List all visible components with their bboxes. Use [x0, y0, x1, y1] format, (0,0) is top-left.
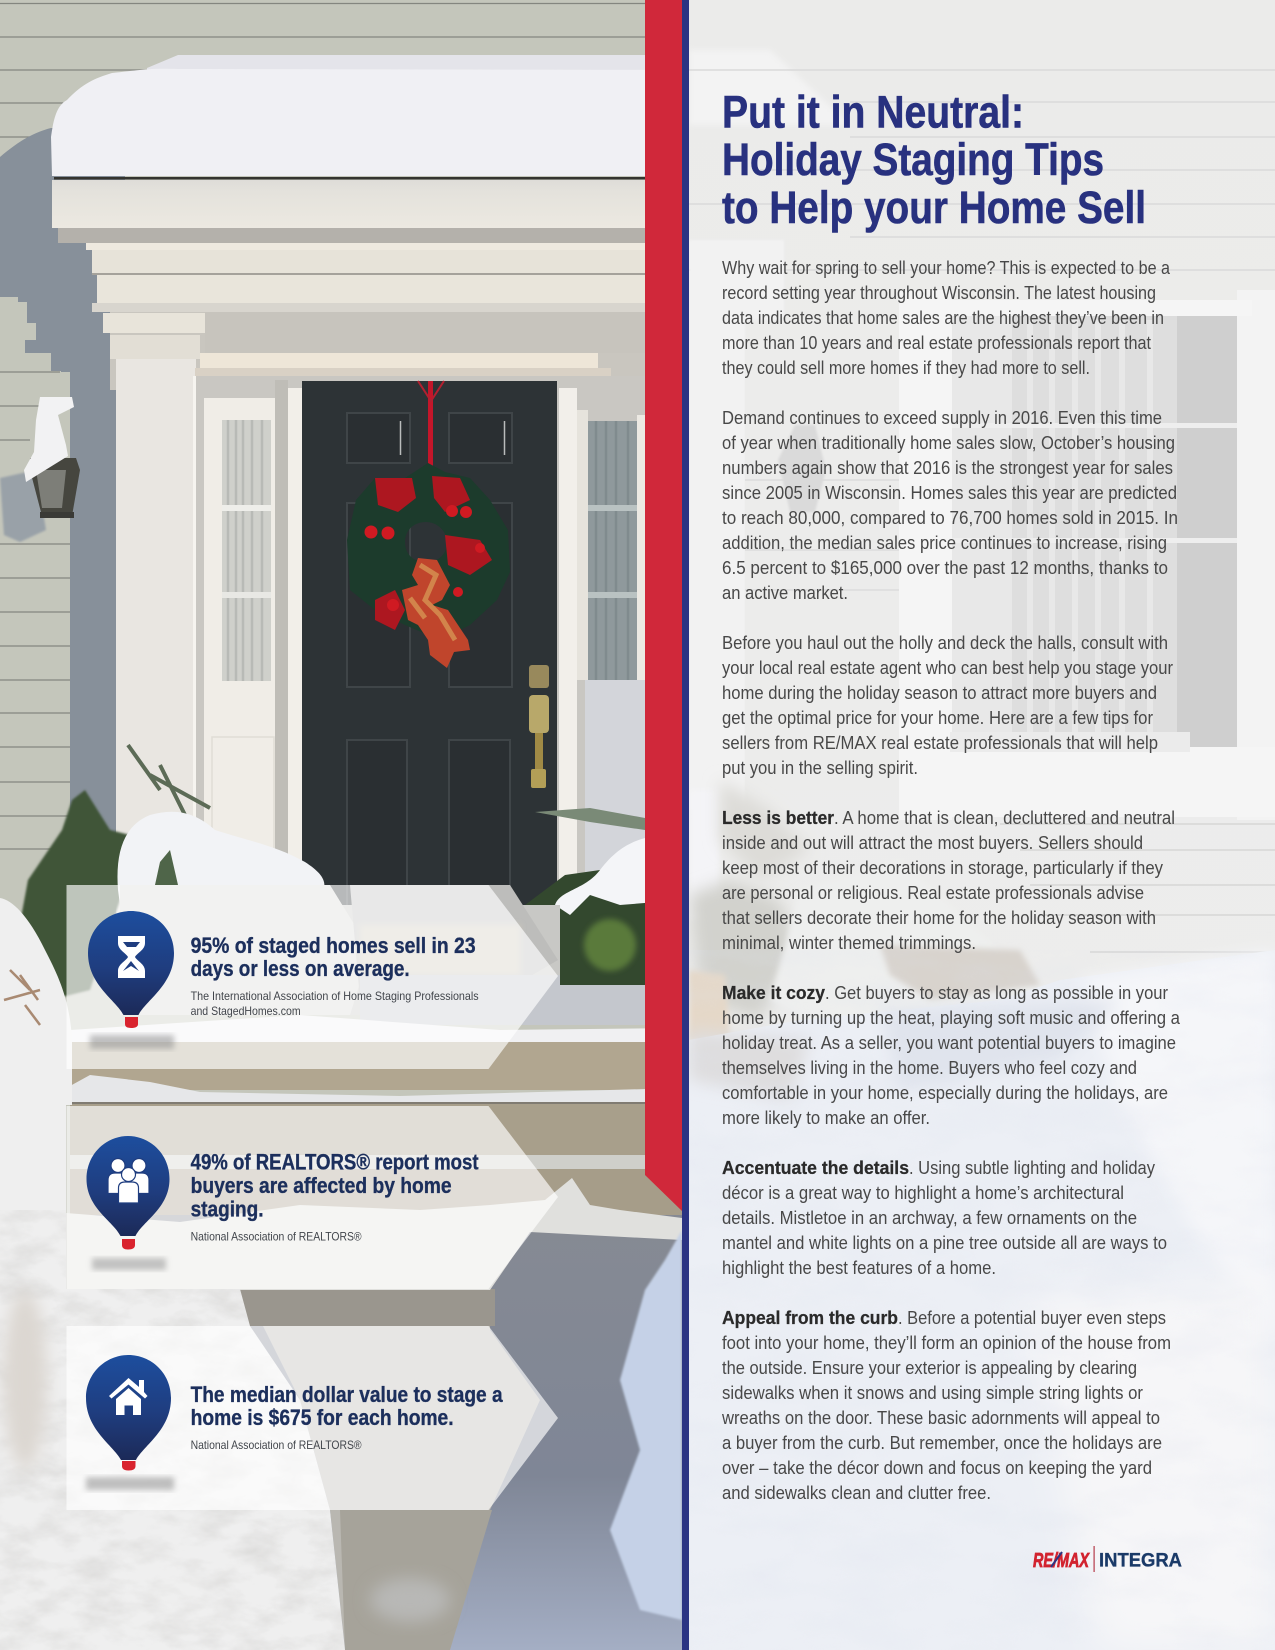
logo: RE/MAX Integra: [1033, 1546, 1182, 1572]
title: Put it in Neutral:: [722, 87, 1024, 138]
gable wall: [110, 312, 125, 390]
washed lantern: [778, 425, 826, 512]
paragraph: before you haul out the holly: get the optimal price for your home. Here are a few tips for: [722, 707, 1153, 728]
right bush with snow: [526, 808, 645, 985]
stat text 3: National Association of REALTORS®: [191, 1439, 362, 1452]
tip: appeal from the curb: Appeal from the curb: [722, 1307, 898, 1328]
right panel: washed-out photo background: [689, 0, 1275, 1650]
left bush with snow: [15, 745, 324, 1000]
tip: make it cozy: comfortable in your home, especially during the holidays, are: [722, 1082, 1168, 1103]
stat text 1: [191, 933, 479, 1018]
walkway: [66, 1178, 682, 1650]
tip: accentuate the details: . Using subtle lighting and holiday: [909, 1157, 1156, 1178]
roof and lamp shadow on siding: [0, 128, 125, 920]
wreath: [347, 381, 510, 668]
balloon shadow 2: [92, 1258, 166, 1270]
logo: RE/MAX Integra: RE/MAX: [1033, 1550, 1090, 1572]
paragraph: demand: [722, 407, 1178, 603]
accent bar: blue stripe: [682, 0, 689, 1650]
tip: make it cozy: more likely to make an offer.: [722, 1107, 930, 1128]
stat text 2: staging.: [191, 1196, 264, 1222]
logo: RE/MAX Integra: INTEGRA: [1099, 1550, 1182, 1572]
stat text 3: home is $675 for each home.: [191, 1405, 454, 1430]
arrow banner 3: [66, 1326, 558, 1510]
title: [722, 87, 1146, 233]
paragraph: demand: addition, the median sales price continues to increase, rising: [722, 532, 1167, 553]
photo: snowy front door with wreath: [0, 0, 682, 1650]
balloon shadow 1: [90, 1035, 174, 1049]
tip: appeal from the curb: [721, 1307, 1171, 1503]
tip: appeal from the curb: and sidewalks clean and clutter free.: [722, 1482, 991, 1503]
stat text 2: National Association of REALTORS®: [191, 1230, 362, 1244]
tip: make it cozy: . Get buyers to stay as long as possible in your: [825, 982, 1168, 1003]
stat text 2: 49% of REALTORS® report most: [191, 1150, 479, 1174]
tip: less is better: keep most of their decorations in storage, particularly if they: [722, 857, 1164, 878]
title: to Help your Home Sell: [722, 182, 1146, 233]
stat text 3: The median dollar value to stage a: [191, 1382, 503, 1407]
paragraph: before you haul out the holly: sellers from RE/MAX real estate professionals that will help: [722, 732, 1158, 753]
tip: accentuate the details: mantel and white lights on a pine tree outside all are ways to: [722, 1232, 1167, 1253]
tip: appeal from the curb: a buyer from the curb. But remember, once the holidays are: [722, 1432, 1162, 1453]
paragraph: intro: [722, 257, 1171, 378]
stat text 1: 95% of staged homes sell in 23: [191, 933, 476, 958]
paragraph: intro: more than 10 years and real estate professionals report that: [722, 332, 1152, 353]
right snowbank: [610, 1230, 682, 1620]
tip: appeal from the curb: over – take the décor down and focus on keeping the yard: [722, 1457, 1152, 1478]
left snowbank: [0, 898, 350, 1650]
snow on roof: [51, 55, 682, 176]
paragraph: before you haul out the holly: home during the holiday season to attract more buyers and: [722, 682, 1157, 703]
paragraph: demand: to reach 80,000, compared to 76,700 homes sold in 2015. In: [722, 507, 1178, 528]
tip: make it cozy: holiday treat. As a seller, you want potential buyers to imagine: [722, 1032, 1176, 1053]
paragraph: intro: record setting year throughout Wisconsin. The latest housing: [722, 282, 1156, 303]
paragraph: demand: of year when traditionally home sales slow, October’s housing: [722, 432, 1175, 453]
stat text 2: buyers are affected by home: [191, 1173, 452, 1198]
paragraph: before you haul out the holly: [722, 632, 1173, 778]
wall lamp: [24, 397, 80, 518]
tip: accentuate the details: highlight the best features of a home.: [722, 1257, 996, 1278]
tip: appeal from the curb: . Before a potential buyer even steps: [898, 1307, 1166, 1328]
right trim and sidelight: [559, 388, 645, 880]
paragraph: before you haul out the holly: put you in the selling spirit.: [722, 757, 918, 778]
column: [103, 313, 205, 919]
balloon shadow 3: [86, 1477, 174, 1490]
balloon icon: people: [86, 1136, 170, 1250]
stat text 1: The International Association of Home Staging Professionals: [191, 990, 479, 1003]
tip: less is better: inside and out will attract the most buyers. Sellers should: [722, 832, 1143, 853]
bow: [402, 558, 470, 668]
tip: less is better: [722, 807, 1175, 953]
stat text 1: and StagedHomes.com: [191, 1005, 301, 1018]
siding lines: [689, 70, 1275, 270]
tip: appeal from the curb: wreaths on the door. These basic adornments will appeal to: [721, 1407, 1160, 1428]
tip: accentuate the details: [722, 1157, 1167, 1278]
door: [302, 381, 557, 910]
tip: accentuate the details: details. Mistletoe in an archway, a few ornaments on the: [722, 1207, 1137, 1228]
dried twigs: [4, 970, 40, 1025]
tip: accentuate the details: décor is a great way to highlight a home’s architectural: [722, 1182, 1124, 1203]
paragraph: demand: since 2005 in Wisconsin. Homes sales this year are predicted: [722, 482, 1177, 503]
lintel: [195, 353, 611, 376]
paragraph: intro: Why wait for spring to sell your home? This is expected to be a: [722, 257, 1171, 278]
siding boards: [0, 4, 645, 849]
tip: make it cozy: [722, 982, 1181, 1128]
left sidelight: [204, 380, 302, 910]
tip: make it cozy: themselves living in the home. Buyers who feel cozy and: [722, 1057, 1137, 1078]
stat text 1: days or less on average.: [191, 956, 410, 981]
washed window: [950, 316, 1237, 752]
paragraph: demand: an active market.: [722, 582, 848, 603]
paragraph: demand: Demand continues to exceed supply in 2016. Even this time: [722, 407, 1162, 428]
tip: less is better: minimal, winter themed trimmings.: [722, 932, 976, 953]
title: Holiday Staging Tips: [722, 134, 1104, 185]
tip: appeal from the curb: the outside. Ensure your exterior is appealing by clearing: [722, 1357, 1137, 1378]
tip: make it cozy: home by turning up the heat, playing soft music and offering a: [722, 1007, 1181, 1028]
washed snow: [689, 950, 1275, 1650]
washed pine branches: [689, 780, 1050, 1040]
porch steps: [70, 885, 682, 1219]
paragraph: demand: numbers again show that 2016 is the strongest year for sales: [722, 457, 1173, 478]
paragraph: intro: data indicates that home sales are the highest they’ve been in: [722, 307, 1164, 328]
accent bar: red ribbon: [645, 0, 682, 1211]
paragraph: demand: 6.5 percent to $165,000 over the past 12 months, thanks to: [722, 557, 1168, 578]
paragraph: before you haul out the holly: Before you haul out the holly and deck the halls, consult with: [722, 632, 1168, 653]
stat callout 2: [66, 1106, 558, 1289]
arrow banner 1: [66, 885, 558, 1069]
tip: less is better: Less is better: [722, 807, 834, 828]
tip: less is better: . A home that is clean, decluttered and neutral: [834, 807, 1175, 828]
tip: less is better: that sellers decorate their home for the holiday season with: [722, 907, 1156, 928]
paragraph: intro: they could sell more homes if they had more to sell.: [722, 357, 1090, 378]
tip: accentuate the details: Accentuate the details: [722, 1157, 909, 1178]
gutter and trim boards: [52, 177, 645, 312]
entry wall: [196, 376, 197, 818]
stat callout 3: [66, 1326, 558, 1510]
balloon icon: house: [86, 1355, 171, 1470]
door hardware: [529, 665, 549, 788]
stat text 2: [191, 1150, 479, 1244]
tip: make it cozy: Make it cozy: [722, 982, 826, 1003]
tip: appeal from the curb: foot into your home, they’ll form an opinion of the house from: [722, 1332, 1171, 1353]
paragraph: before you haul out the holly: your local real estate agent who can best help you stage your: [722, 657, 1173, 678]
tip: less is better: are personal or religious. Real estate professionals advise: [722, 882, 1144, 903]
stat callout 1: [66, 885, 558, 1069]
stat text 3: [191, 1382, 503, 1452]
balloon icon: hourglass: [88, 911, 174, 1028]
washed siding lower right: [1000, 824, 1275, 952]
tip: appeal from the curb: sidewalks when it snows and using simple string lights or: [722, 1382, 1143, 1403]
arrow banner 2: [66, 1106, 558, 1289]
